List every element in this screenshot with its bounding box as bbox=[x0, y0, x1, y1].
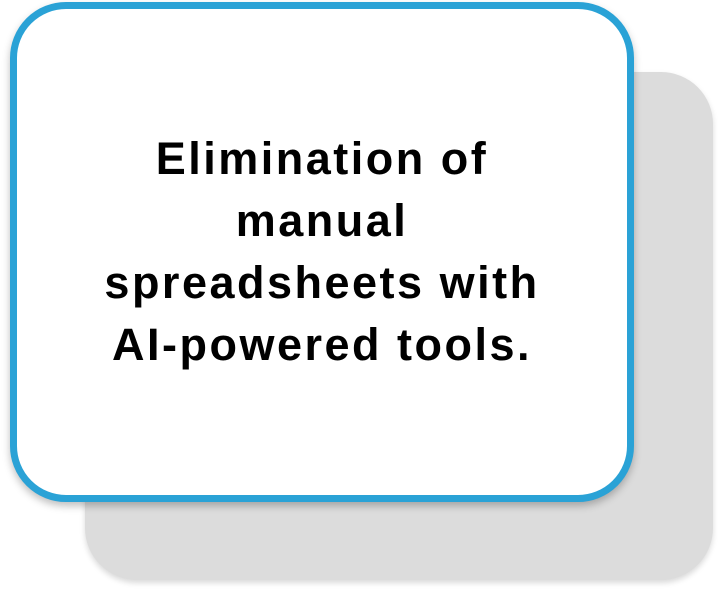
text block: main statement bbox=[104, 133, 540, 370]
text block: main statement: manual bbox=[236, 195, 408, 246]
text block: main statement: Elimination of bbox=[156, 133, 488, 184]
panel: main card bbox=[10, 2, 634, 502]
text block: main statement: spreadsheets with bbox=[104, 257, 540, 308]
panel: background shadow card bbox=[85, 72, 713, 580]
text block: main statement: AI-powered tools. bbox=[112, 319, 532, 370]
